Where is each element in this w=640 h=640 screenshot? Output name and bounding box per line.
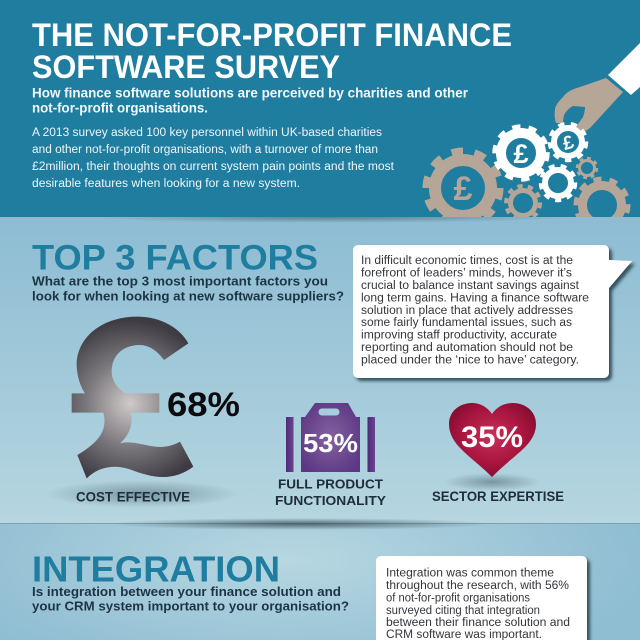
- question: top 3 factors: What are the top 3 most important factors you: [32, 274, 328, 288]
- callout: integration commentary: between their finance solution and: [386, 617, 570, 629]
- callout: integration commentary: surveyed citing that integration: [386, 605, 540, 617]
- title: [32, 17, 512, 85]
- icon: large white pound gear: £: [513, 139, 529, 169]
- callout: cost commentary: [353, 245, 632, 378]
- icon: purple briefcase: [286, 403, 375, 472]
- callout: cost commentary: solution in place that actively addresses: [361, 305, 573, 317]
- callout: integration commentary: of not-for-profit organisations: [386, 592, 530, 604]
- stat: sector expertise: 35%: [461, 421, 523, 454]
- icon: hand: [555, 78, 623, 136]
- title: THE NOT-FOR-PROFIT FINANCE: [32, 17, 512, 53]
- stat: sector expertise: [432, 403, 564, 504]
- stat: full product functionality: [275, 403, 387, 508]
- stat: cost effective: COST EFFECTIVE: [76, 490, 190, 504]
- illustration: gears and hand: [426, 43, 640, 231]
- callout: cost commentary: crucial to balance instant savings against: [361, 280, 580, 292]
- question: integration: your CRM system important to your organisation?: [32, 598, 349, 614]
- heading: integration: INTEGRATION: [32, 548, 280, 590]
- stat: sector expertise: SECTOR EXPERTISE: [432, 489, 564, 504]
- callout: cost commentary: In difficult economic times, cost is at the: [361, 255, 573, 267]
- callout: cost commentary: reporting and automation should not be: [361, 342, 573, 354]
- stat: full product functionality: 53%: [303, 428, 358, 458]
- callout: integration commentary: throughout the research, with 56%: [386, 580, 569, 592]
- icon: medium white gear: [540, 166, 576, 200]
- callout: cost commentary: improving staff productivity, accurate: [361, 330, 557, 342]
- question: integration: Is integration between your finance solution and: [32, 584, 341, 599]
- icon: heart: [449, 403, 536, 477]
- icon: right tan gear: [574, 176, 630, 217]
- icon: shirt cuff: [608, 43, 640, 95]
- icon: small tan gear: [506, 186, 540, 220]
- intro text: and other not-for-profit organisations, with a turnover of more than: [32, 144, 378, 156]
- icon: pound sign: [72, 317, 193, 478]
- stat: cost effective: 68%: [167, 386, 240, 424]
- callout: cost commentary: forefront of leaders’ minds, however it’s: [361, 268, 572, 280]
- subtitle: not-for-profit organisations.: [32, 100, 208, 116]
- question: top 3 factors: [32, 274, 344, 304]
- panel: top 3 factors background: [0, 217, 640, 524]
- intro text: desirable features when looking for a new system.: [32, 178, 300, 190]
- intro text: [32, 127, 395, 190]
- icon: large tan pound gear: [426, 151, 500, 225]
- question: top 3 factors: look for when looking at new software suppliers?: [32, 288, 344, 304]
- intro text: A 2013 survey asked 100 key personnel within UK-based charities: [32, 127, 382, 139]
- title: SOFTWARE SURVEY: [32, 49, 340, 85]
- callout: integration commentary: Integration was common theme: [386, 568, 554, 580]
- intro text: £2million, their thoughts on current system pain points and the most: [32, 161, 395, 173]
- panel: integration background: [0, 524, 640, 640]
- callout: cost commentary: some fairly fundamental issues, such as: [361, 317, 572, 329]
- heading: top 3 factors: TOP 3 FACTORS: [32, 238, 318, 278]
- stat: cost effective: [45, 317, 240, 508]
- icon: tiny tan gear: [577, 158, 597, 178]
- panel: header background: [0, 0, 640, 217]
- icon: small white pound gear: £: [561, 132, 577, 155]
- stat: full product functionality: FUNCTIONALITY: [275, 494, 387, 508]
- icon: small white pound gear: [550, 124, 586, 160]
- callout: integration commentary: [376, 556, 587, 640]
- icon: large white pound gear: [494, 126, 548, 180]
- stat: full product functionality: FULL PRODUCT: [278, 478, 383, 492]
- callout: cost commentary: long term gains. Having a finance software: [361, 292, 589, 304]
- callout: cost commentary: placed under the ‘nice to have’ category.: [361, 354, 579, 366]
- subtitle: [32, 86, 469, 116]
- question: integration: [32, 584, 349, 614]
- icon: large tan pound gear: £: [454, 170, 473, 208]
- subtitle: How finance software solutions are perceived by charities and other: [32, 86, 469, 100]
